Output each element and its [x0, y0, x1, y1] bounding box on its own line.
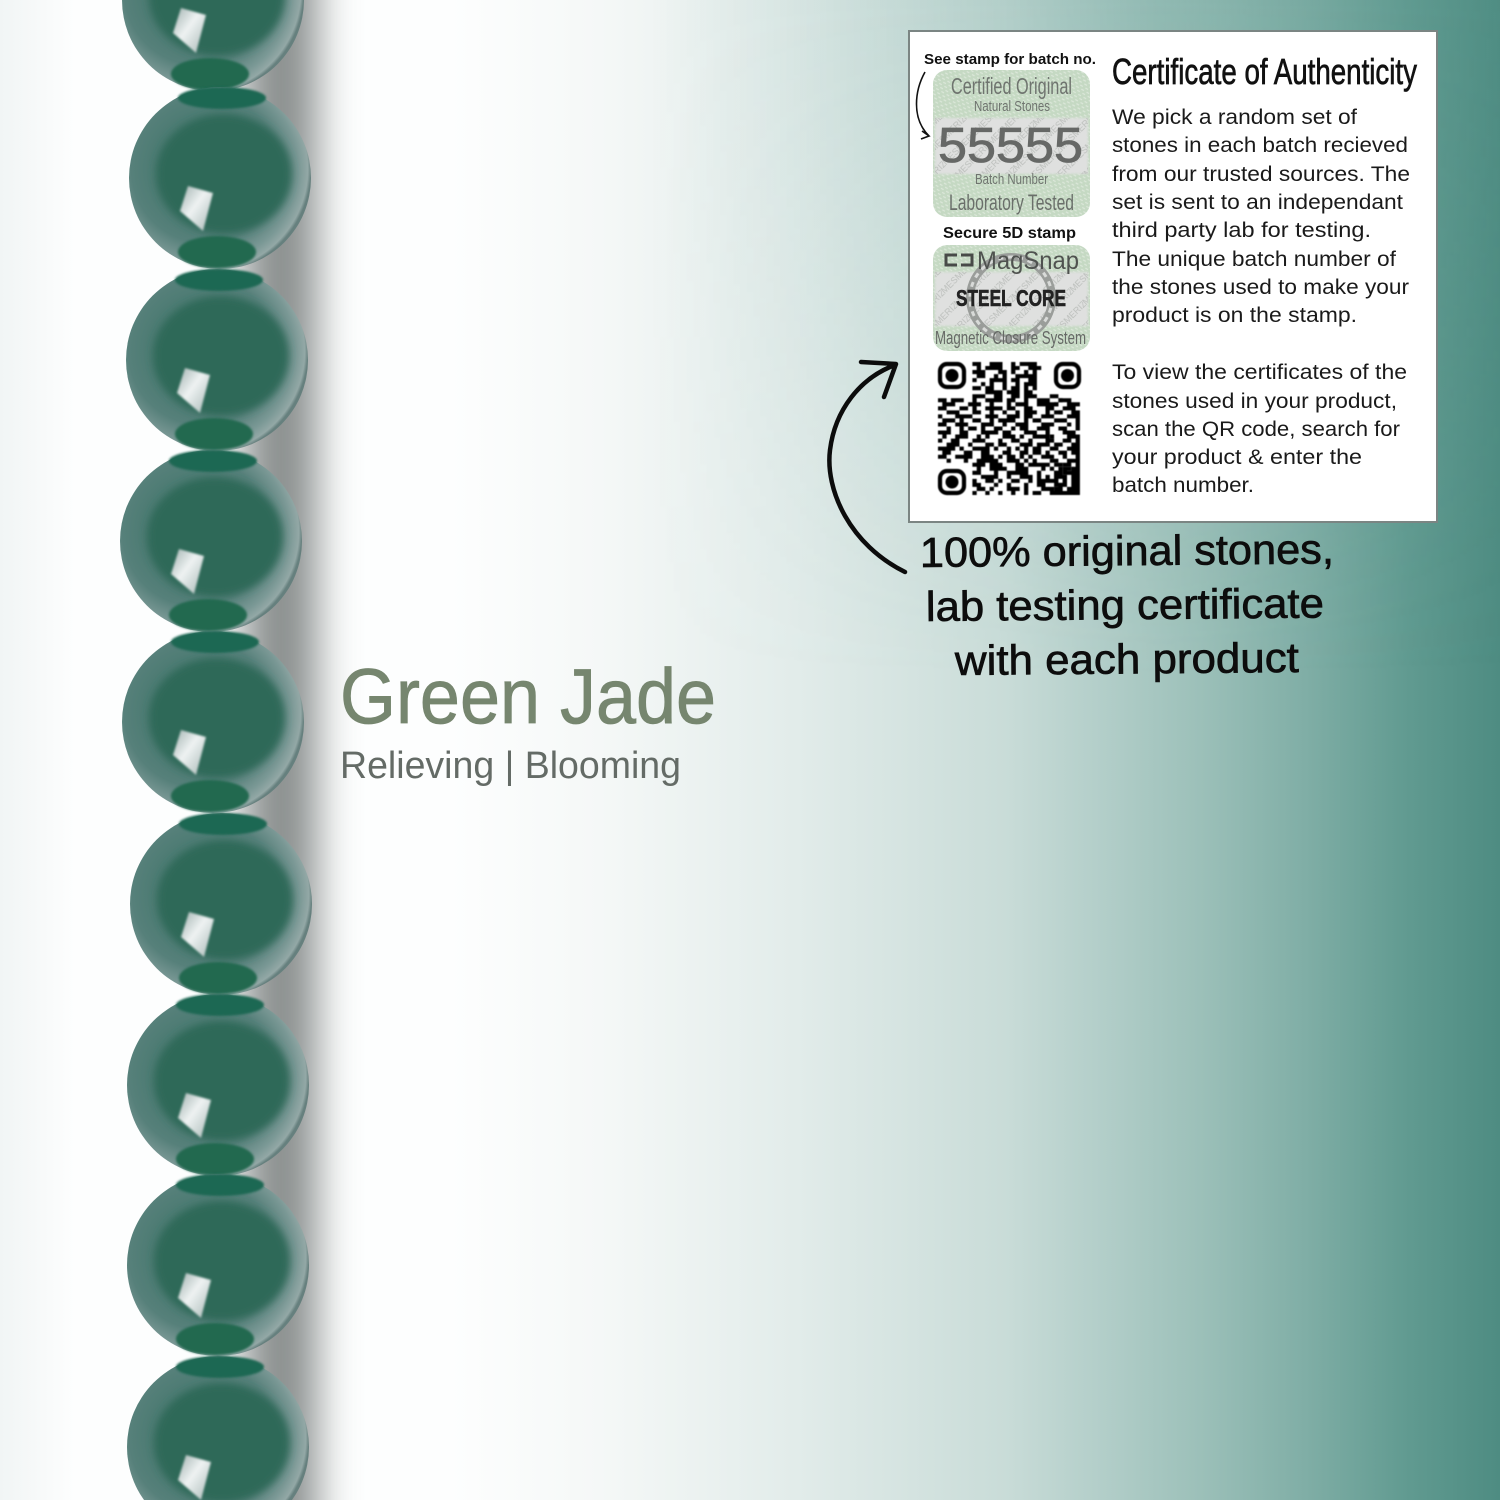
batch number stamp: Certified Original	[951, 73, 1072, 99]
stamp caption: See stamp for batch no.	[924, 52, 1096, 68]
batch number stamp: Natural Stones	[974, 98, 1050, 115]
batch number stamp	[933, 70, 1090, 217]
batch number stamp: 55555	[938, 119, 1083, 173]
panel: certificate card	[909, 31, 1437, 522]
title: Green Jade	[340, 652, 716, 740]
text block: testing explanation: stones in each batch recieved	[1112, 133, 1408, 157]
green jade bead strand	[120, 0, 312, 1500]
callout text	[920, 525, 1334, 684]
text block: testing explanation: set is sent to an independant	[1112, 190, 1403, 214]
text block: testing explanation: The unique batch number of	[1112, 247, 1396, 271]
callout text: lab testing certificate	[926, 580, 1324, 630]
text block: testing explanation: third party lab for testing.	[1112, 218, 1371, 242]
text block: testing explanation	[1112, 105, 1410, 327]
text block: QR instructions: batch number.	[1112, 473, 1254, 497]
QR code right-hand modules	[1050, 400, 1080, 493]
text block: QR instructions: scan the QR code, search for	[1112, 417, 1400, 441]
bead strand shadow	[245, 0, 317, 1500]
text block: QR instructions: stones used in your product,	[1112, 389, 1397, 413]
subtitle: Relieving | Blooming	[340, 745, 681, 787]
QR code	[938, 364, 1080, 493]
text block: testing explanation: We pick a random set of	[1112, 105, 1357, 129]
secure 5D stamp: STEEL CORE	[956, 285, 1066, 311]
callout text: with each product	[954, 634, 1299, 684]
text block: testing explanation: from our trusted sources. The	[1112, 162, 1410, 186]
batch number stamp: Laboratory Tested	[949, 190, 1074, 215]
batch number stamp: Batch Number	[975, 171, 1048, 188]
icon: small arrow to batch number	[916, 72, 929, 139]
secure 5D stamp	[933, 245, 1090, 351]
text block: testing explanation: product is on the stamp.	[1112, 303, 1357, 327]
arrow: callout to certificate	[829, 362, 905, 572]
stamp caption: Secure 5D stamp	[943, 225, 1076, 242]
text block: testing explanation: the stones used to make your	[1112, 275, 1409, 299]
heading: certificate of authenticity: Certificate of Authenticity	[1112, 51, 1417, 92]
callout text: 100% original stones,	[920, 525, 1334, 576]
text block: QR instructions	[1112, 360, 1407, 497]
text block: QR instructions: To view the certificates of the	[1112, 360, 1407, 384]
secure 5D stamp: Magnetic Closure System	[935, 328, 1086, 348]
secure 5D stamp: MagSnap	[977, 247, 1079, 275]
text block: QR instructions: your product & enter the	[1112, 445, 1362, 469]
